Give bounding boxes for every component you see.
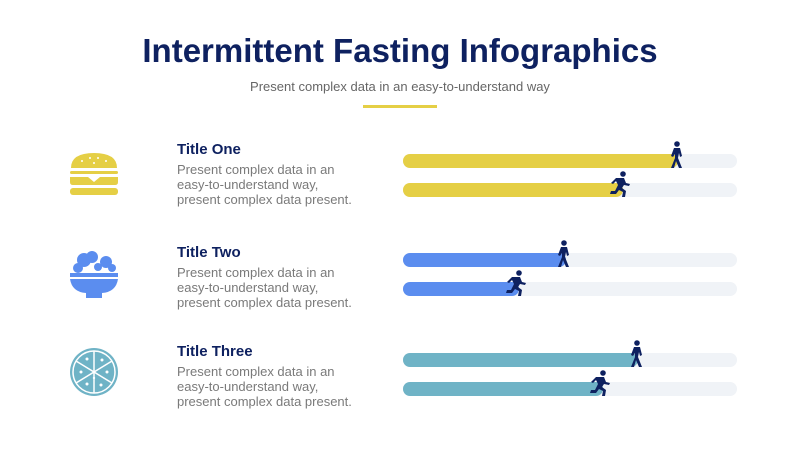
subtitle: Present complex data in an easy-to-understand way	[250, 79, 550, 94]
bar group 2	[403, 240, 737, 296]
title: Intermittent Fasting Infographics	[142, 32, 658, 69]
icon: burger	[70, 153, 118, 195]
text block: title one	[177, 141, 352, 207]
text block: title three: Title Three	[177, 343, 253, 360]
text block: title two: Present complex data in an	[177, 265, 335, 280]
bar group 1	[403, 141, 737, 197]
text block: title one: present complex data present.	[177, 192, 352, 207]
text block: title one: Present complex data in an	[177, 162, 335, 177]
underline accent	[363, 105, 437, 108]
text block: title three	[177, 343, 352, 409]
text block: title two: Title Two	[177, 244, 241, 261]
icon: salad bowl	[70, 251, 118, 298]
text block: title two	[177, 244, 352, 310]
text block: title three: Present complex data in an	[177, 364, 335, 379]
text block: title two: easy-to-understand way,	[177, 280, 318, 295]
bar group 3	[403, 340, 737, 396]
text block: title three: easy-to-understand way,	[177, 379, 318, 394]
text block: title two: present complex data present.	[177, 295, 352, 310]
text block: title one: Title One	[177, 141, 241, 158]
icon: pizza	[70, 348, 118, 396]
text block: title three: present complex data present.	[177, 394, 352, 409]
text block: title one: easy-to-understand way,	[177, 177, 318, 192]
